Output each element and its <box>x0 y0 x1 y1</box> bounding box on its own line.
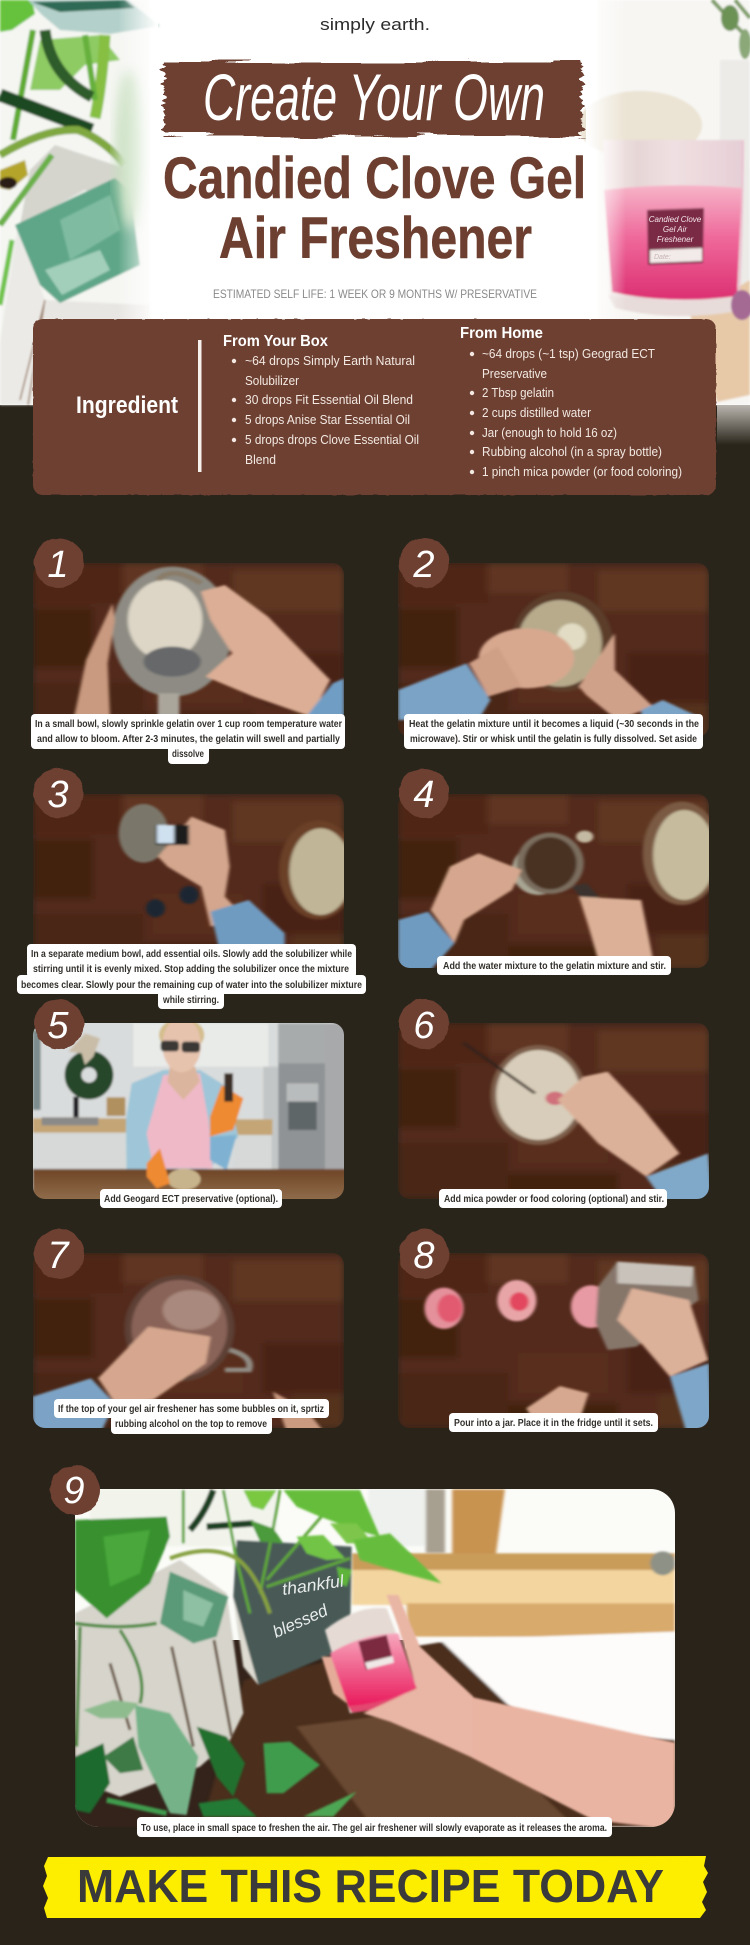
sign lettering: blessed <box>270 1600 331 1642</box>
list: from your box: 30 drops Fit Essential Oil Blend <box>245 392 413 407</box>
title: Candied Clove Gel <box>163 146 586 211</box>
list: from your box: Blend <box>245 452 276 467</box>
caption: step 4 <box>437 956 671 975</box>
badge: 2: 2 <box>412 544 435 586</box>
shelf life note: ESTIMATED SELF LIFE: 1 WEEK OR 9 MONTHS W/ PRESERVATIVE <box>213 287 537 301</box>
caption: step 8: Pour into a jar. Place it in the fridge until it sets. <box>454 1417 653 1429</box>
list: from home: 2 Tbsp gelatin <box>482 385 554 400</box>
caption: step 3 <box>17 944 366 1009</box>
heading: Ingredient: Ingredient <box>76 392 178 419</box>
jar label text: Gel Air <box>663 225 687 234</box>
badge: 6: 6 <box>413 1005 435 1047</box>
badge: 4: 4 <box>413 774 435 816</box>
title <box>163 146 586 271</box>
banner: Create Your Own: Create Your Own <box>203 60 545 134</box>
call to action banner: MAKE THIS RECIPE TODAY <box>77 1860 664 1912</box>
caption: step 5: Add Geogard ECT preservative (optional). <box>104 1193 278 1205</box>
badge: 1 <box>34 538 84 588</box>
photo: step 3 <box>33 794 344 944</box>
caption: step 4: Add the water mixture to the gelatin mixture and stir. <box>443 960 666 972</box>
step 1 <box>31 538 345 764</box>
badge: 7 <box>34 1229 84 1279</box>
step 9 <box>50 1465 675 1837</box>
list: from your box: ~64 drops Simply Earth Natural <box>245 353 415 368</box>
list: from home: 1 pinch mica powder (or food coloring) <box>482 464 682 479</box>
caption: step 3: while stirring. <box>162 994 219 1006</box>
photo: step 2 <box>398 563 709 739</box>
photo: step 7 <box>33 1253 344 1433</box>
list: from your box: From Your Box <box>223 333 328 350</box>
photo: step 9 plant and jar <box>75 1489 675 1830</box>
title: Air Freshener <box>219 206 532 271</box>
caption: step 2: Heat the gelatin mixture until it becomes a liquid (~30 seconds in the <box>409 718 699 730</box>
caption: step 9 <box>137 1817 612 1837</box>
list: from home: 2 cups distilled water <box>482 405 592 420</box>
list: from your box: 5 drops Anise Star Essential Oil <box>245 412 410 427</box>
caption: step 5 <box>100 1189 282 1208</box>
list: from home: Rubbing alcohol (in a spray bottle) <box>482 444 662 459</box>
caption: step 6: Add mica powder or food coloring (optional) and stir. <box>444 1193 664 1205</box>
step 5 <box>30 999 350 1208</box>
step 4 <box>398 768 721 975</box>
banner: Create Your Own <box>164 60 582 136</box>
photo: pink gel jar in header right <box>578 0 750 405</box>
sign lettering <box>270 1571 346 1642</box>
step 7 <box>33 1229 344 1434</box>
badge: 5: 5 <box>47 1005 69 1047</box>
jar label text: Freshener <box>657 235 694 244</box>
arm and hand <box>322 1595 675 1830</box>
caption: step 3: stirring until it is evenly mixed. Stop adding the solubilizer once the mixture <box>33 963 349 975</box>
badge: 9: 9 <box>63 1470 85 1512</box>
caption: step 2: microwave). Stir or whisk until the gelatin is fully dissolved. Set aside <box>410 733 697 745</box>
caption: step 1: and allow to bloom. After 2-3 minutes, the gelatin will swell and partially <box>37 733 340 745</box>
photo: pink gel jar in header right: Date: <box>654 254 671 261</box>
step 8 <box>398 1229 713 1433</box>
photo: step 6 <box>398 1023 713 1203</box>
badge: 3: 3 <box>47 774 69 816</box>
jar label text: Candied Clove <box>649 215 702 224</box>
list: from your box: Solubilizer <box>245 373 300 388</box>
caption: step 2 <box>404 714 703 749</box>
badge: 8 <box>399 1229 449 1279</box>
panel: ingredients <box>33 319 716 495</box>
list: from home: Preservative <box>482 366 547 381</box>
photo: step 5 kitchen <box>30 1018 350 1207</box>
list: from home: ~64 drops (~1 tsp) Geograd ECT <box>482 346 655 361</box>
list: from home: From Home <box>460 325 543 342</box>
caption: step 1: In a small bowl, slowly sprinkle gelatin over 1 cup room temperature water <box>35 718 342 730</box>
badge: 1: 1 <box>47 544 69 586</box>
sign lettering: thankful <box>281 1571 346 1599</box>
caption: step 3: becomes clear. Slowly pour the remaining cup of water into the solubilizer mixture <box>21 979 362 991</box>
badge: 4 <box>399 768 449 818</box>
badge: 9 <box>50 1465 100 1515</box>
list: from home <box>460 325 682 479</box>
caption: step 7: If the top of your gel air freshener has some bubbles on it, sprtiz <box>58 1403 324 1415</box>
caption: step 9: To use, place in small space to freshen the air. The gel air freshener will slowly evaporate as it releases the aroma. <box>141 1822 607 1834</box>
step 6 <box>398 999 713 1208</box>
caption: step 1 <box>31 714 345 764</box>
header plant fade <box>118 0 158 405</box>
photo: plant in header left <box>0 0 160 405</box>
caption: step 3: In a separate medium bowl, add essential oils. Slowly add the solubilizer while <box>31 948 352 960</box>
step 3 <box>17 768 366 1009</box>
caption: step 6 <box>439 1189 667 1208</box>
badge: 5 <box>34 999 84 1049</box>
photo: step 4 <box>398 794 721 970</box>
list: from your box <box>223 333 419 467</box>
list: from your box: 5 drops drops Clove Essential Oil <box>245 432 419 447</box>
photo: step 1 <box>33 563 344 716</box>
jar label text <box>649 215 702 244</box>
step 2 <box>398 538 709 749</box>
badge: 6 <box>399 999 449 1049</box>
badge: 8: 8 <box>413 1235 435 1277</box>
caption: step 1: dissolve <box>172 748 204 760</box>
badge: 3 <box>34 768 84 818</box>
caption: step 7 <box>54 1399 329 1434</box>
logo: simply earth. <box>320 15 430 34</box>
badge: 7: 7 <box>47 1235 70 1277</box>
photo: step 8 <box>398 1253 713 1433</box>
list: from home: Jar (enough to hold 16 oz) <box>482 425 617 440</box>
badge: 2 <box>399 538 449 588</box>
caption: step 8 <box>449 1413 658 1432</box>
caption: step 7: rubbing alcohol on the top to remove <box>115 1418 267 1430</box>
